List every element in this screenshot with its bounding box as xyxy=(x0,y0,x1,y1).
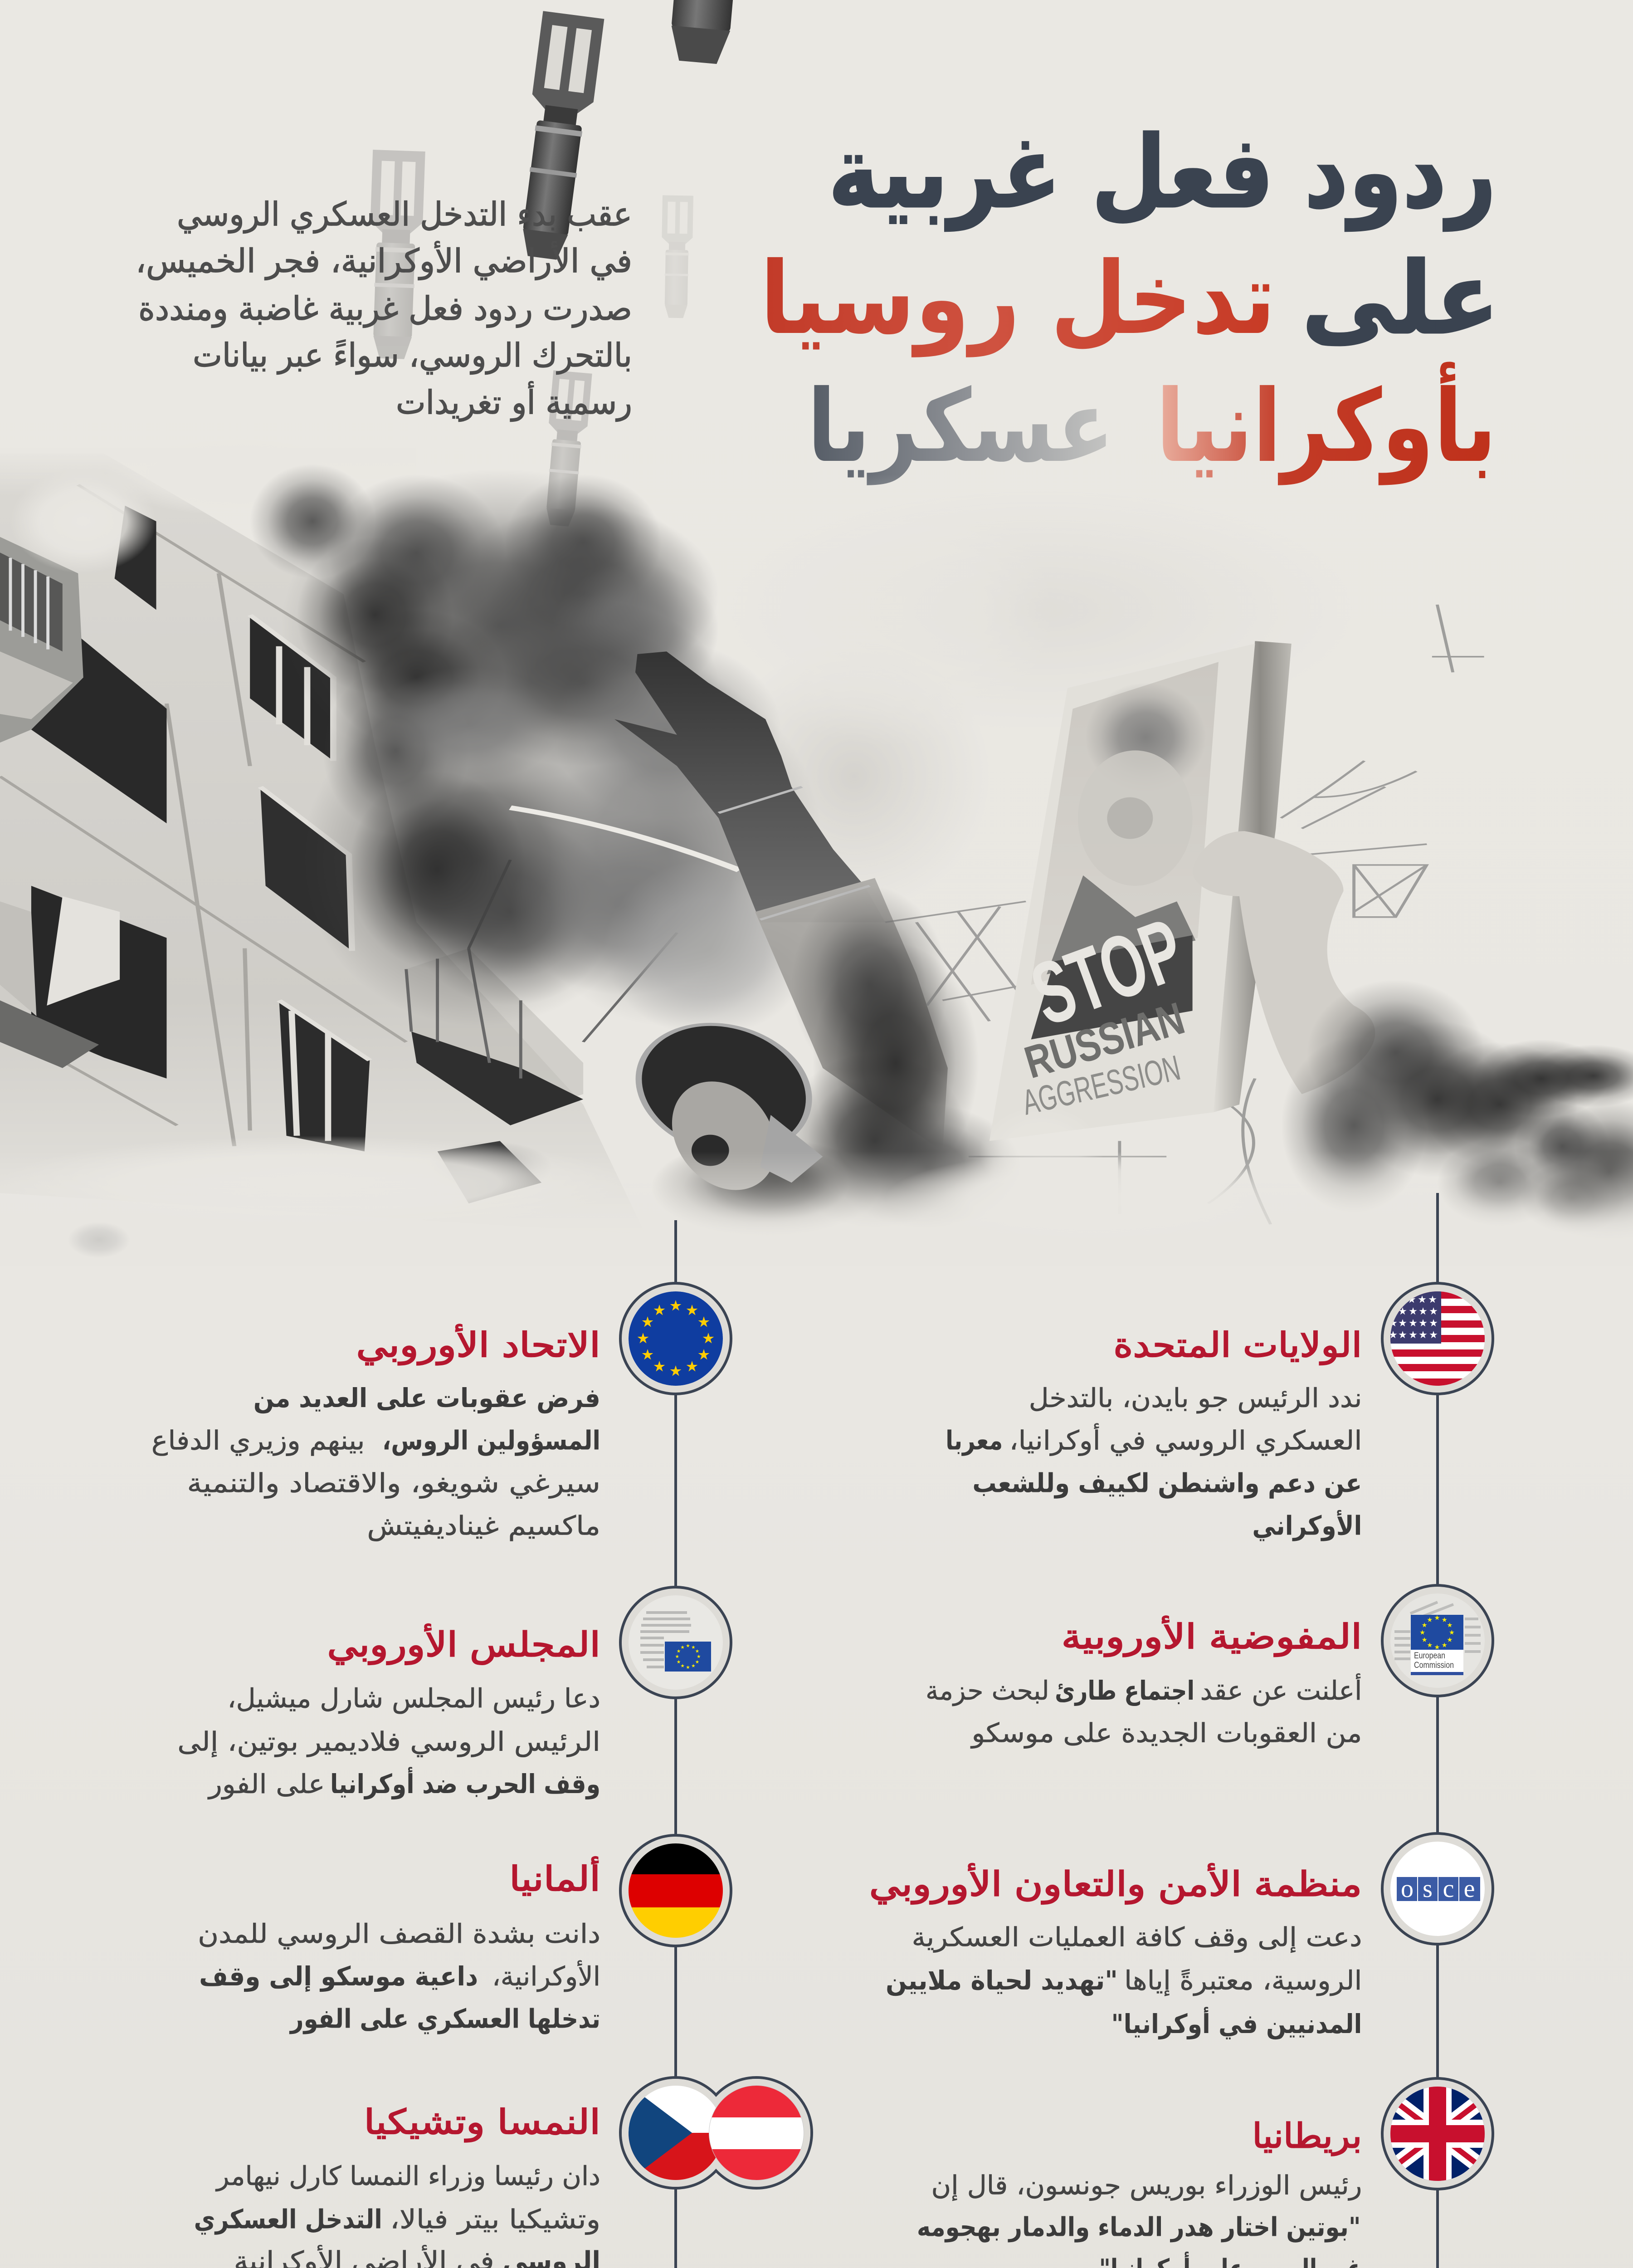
body text: أعلنت عن عقد xyxy=(1200,1673,1362,1706)
body text: داعية موسكو إلى وقف xyxy=(199,1961,478,1992)
protest poster xyxy=(990,641,1292,1141)
mist xyxy=(0,474,1633,1266)
body text: الأوكراني xyxy=(1252,1510,1362,1542)
body text: فرض عقوبات على العديد من xyxy=(253,1383,600,1414)
body text: لبحث حزمة xyxy=(926,1675,1049,1706)
intro paragraph xyxy=(136,195,632,422)
body text: "بوتين اختار هدر الدماء والدمار بهجومه xyxy=(917,2212,1361,2243)
body text: وقف الحرب ضد أوكرانيا xyxy=(330,1767,600,1800)
body text: تدخلها العسكري على الفور xyxy=(289,2004,600,2034)
flag: United Kingdom xyxy=(1382,2078,1493,2189)
intro paragraph: عقب بدء التدخل العسكري الروسي xyxy=(177,195,632,234)
body text: المسؤولين الروس، xyxy=(382,1425,600,1456)
logo: OSCE: e xyxy=(1464,1875,1475,1903)
title: عسكريا xyxy=(807,368,1114,485)
heading: الولايات المتحدة xyxy=(1113,1325,1362,1365)
logo: European Commission xyxy=(1382,1585,1493,1696)
body text: معربا xyxy=(946,1425,1003,1456)
body text xyxy=(946,1383,1362,1542)
body text xyxy=(926,1673,1362,1749)
panel: United States xyxy=(946,1283,1493,1542)
body text xyxy=(194,2160,600,2268)
body text: سيرغي شويغو، والاقتصاد والتنمية xyxy=(187,1468,600,1499)
body text: رئيس الوزراء بوريس جونسون، قال إن xyxy=(931,2170,1362,2201)
water jet xyxy=(510,808,740,870)
heading: ألمانيا xyxy=(509,1857,600,1899)
fence and tree lines xyxy=(885,605,1484,1224)
building xyxy=(0,454,677,1235)
body text: المدنيين في أوكرانيا" xyxy=(1111,2007,1362,2040)
body text xyxy=(151,1383,600,1541)
intro paragraph: صدرت ردود فعل غربية غاضبة ومنددة xyxy=(138,289,632,328)
flag: Germany xyxy=(620,1835,731,1946)
dark smoke beside arm xyxy=(781,886,1021,1230)
flag: European Union xyxy=(620,1283,731,1394)
body text: الروسية، معتبرةً إياها xyxy=(1124,1965,1362,1996)
arm with glove xyxy=(614,651,948,1151)
intro paragraph: في الأراضي الأوكرانية، فجر الخميس، xyxy=(136,241,632,280)
body text: ماكسيم غيناديفيتش xyxy=(367,1510,600,1541)
heading: منظمة الأمن والتعاون الأوروبي xyxy=(869,1863,1362,1904)
body text: عن دعم واشنطن لكييف وللشعب xyxy=(972,1468,1362,1499)
panel: Germany xyxy=(198,1835,731,2034)
title: بأوكرانيا xyxy=(1156,362,1497,486)
intro paragraph: رسمية أو تغريدات xyxy=(396,381,632,422)
timeline left xyxy=(674,1220,677,2268)
body text xyxy=(917,2170,1362,2268)
logo: OSCE xyxy=(1382,1833,1493,1944)
firefighter helmet and face xyxy=(619,1017,880,1237)
dark smoke lower right xyxy=(1281,979,1633,1245)
top edge mist xyxy=(0,433,417,516)
title: ردود فعل غربية xyxy=(828,114,1497,232)
body text: الرئيس الروسي فلاديمير بوتين، إلى xyxy=(177,1726,600,1758)
heading: النمسا وتشيكيا xyxy=(364,2102,600,2142)
timeline right xyxy=(1436,1193,1439,2268)
body text xyxy=(886,1922,1362,2040)
title: تدخل روسيا xyxy=(760,240,1276,358)
body text: دان رئيسا وزراء النمسا كارل نيهامر xyxy=(215,2160,600,2191)
poster text xyxy=(1019,899,1196,1123)
panel: Britain xyxy=(917,2078,1493,2268)
body text: على الفور xyxy=(207,1769,325,1799)
flag: USA xyxy=(1382,1283,1493,1394)
body text xyxy=(198,1918,600,2034)
body text: التدخل العسكري xyxy=(194,2204,382,2235)
body text: "تهديد لحياة ملايين xyxy=(886,1965,1118,1996)
poster text: AGGRESSION xyxy=(1019,1047,1184,1123)
body text: من العقوبات الجديدة على موسكو xyxy=(970,1718,1362,1749)
panel: European Commission xyxy=(926,1585,1493,1749)
body text: دعا رئيس المجلس شارل ميشيل، xyxy=(227,1683,600,1714)
body text xyxy=(177,1683,600,1800)
panel: European Council xyxy=(177,1587,731,1800)
title: على xyxy=(1302,240,1500,357)
poster text: RUSSIAN xyxy=(1019,992,1190,1088)
logo: OSCE: s xyxy=(1423,1875,1433,1903)
smoke plume xyxy=(250,464,1354,1193)
logo: European Commission: Commission xyxy=(1414,1661,1454,1670)
title xyxy=(760,114,1500,486)
panel: OSCE xyxy=(869,1833,1493,2040)
flags: Czechia and Austria xyxy=(620,2077,812,2188)
intro paragraph: بالتحرك الروسي، سواءً عبر بيانات xyxy=(193,336,632,375)
heading: المجلس الأوروبي xyxy=(327,1624,600,1665)
hero photo collage xyxy=(0,433,1633,1266)
falling bombs xyxy=(366,0,765,528)
hand holding poster xyxy=(1193,831,1375,1094)
body text: دانت بشدة القصف الروسي للمدن xyxy=(198,1918,600,1949)
heading: بريطانيا xyxy=(1252,2116,1362,2156)
body text: اجتماع طارئ xyxy=(1055,1675,1194,1706)
logo: European Council xyxy=(620,1587,731,1698)
logo: OSCE: o xyxy=(1401,1875,1414,1903)
logo: OSCE: c xyxy=(1443,1875,1454,1903)
body text: وتشيكيا بيتر فيالا، xyxy=(390,2204,600,2235)
logo: European Commission: European xyxy=(1414,1651,1445,1661)
heading: الاتحاد الأوروبي xyxy=(356,1325,600,1365)
body text: بينهم وزيري الدفاع xyxy=(151,1425,365,1456)
heading: المفوضية الأوروبية xyxy=(1061,1616,1362,1657)
body text: العسكري الروسي في أوكرانيا، xyxy=(1009,1423,1362,1456)
body text: دعت إلى وقف كافة العمليات العسكرية xyxy=(912,1922,1362,1953)
poster text: STOP xyxy=(1019,899,1196,1044)
body text: ندد الرئيس جو بايدن، بالتدخل xyxy=(1029,1383,1362,1413)
panel: Austria and Czechia xyxy=(194,2077,812,2268)
panel: European Union xyxy=(151,1283,731,1541)
body text: الأوكرانية، xyxy=(492,1960,600,1992)
